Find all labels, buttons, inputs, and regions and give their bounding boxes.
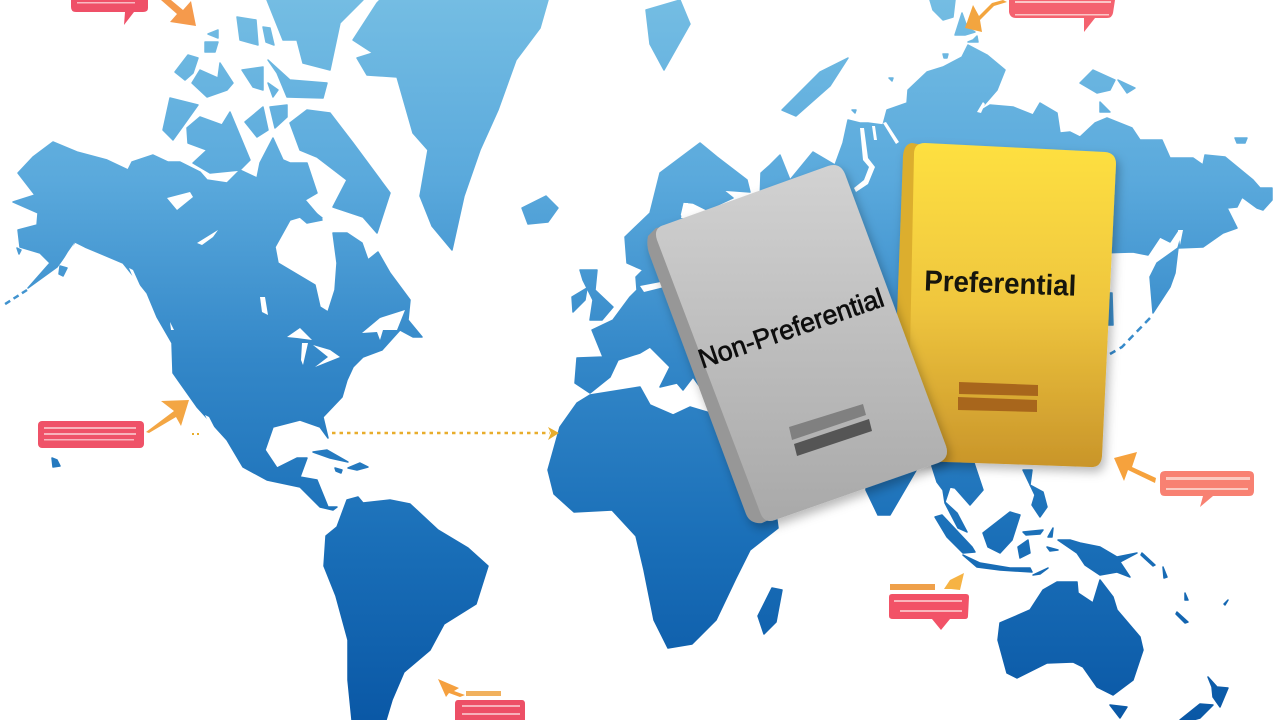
landmass: South America — [324, 497, 488, 720]
Preferential book — [892, 143, 1116, 467]
book cover — [656, 165, 947, 521]
arrow: top right — [965, 0, 1007, 32]
landmass: Kamchatka peninsula — [1150, 248, 1178, 313]
landmass: Australia — [998, 580, 1143, 695]
Non-Preferential book — [647, 165, 947, 523]
landmass: Philippines — [1023, 470, 1047, 517]
landmass: Indochina — [930, 460, 983, 532]
book label: Preferential — [924, 265, 1077, 303]
landmass: Borneo — [983, 512, 1020, 553]
Baltic Sea — [640, 203, 688, 292]
book stripes — [789, 404, 872, 456]
landmass: Ireland — [572, 288, 587, 312]
arrow: right — [1114, 452, 1156, 483]
Lake Winnipeg — [260, 297, 268, 315]
landmass: Indian peninsula — [866, 455, 925, 515]
landmass: Pacific islands — [1033, 528, 1228, 623]
landmass: island beside Preferential book — [1108, 293, 1113, 325]
landmass: New Zealand — [1180, 677, 1228, 720]
Gulf of California — [205, 415, 226, 452]
arrow: left — [146, 400, 189, 433]
book spine — [647, 220, 790, 523]
callout: left — [38, 421, 144, 448]
landmass: North America — [13, 138, 422, 510]
Vancouver strait — [129, 268, 174, 330]
landmass: Sulawesi — [1018, 530, 1043, 558]
landmass: Africa — [548, 387, 778, 648]
landmass: Greenland — [353, 0, 548, 250]
Siberian gulfs — [854, 122, 899, 192]
Canadian lakes — [167, 192, 218, 245]
book cover — [908, 143, 1116, 467]
landmass: Sumatra — [935, 515, 975, 553]
Okhotsk gulf cutout — [977, 102, 985, 113]
landmass: Alaskan and Pacific islands — [17, 248, 67, 467]
Lake Huron — [313, 345, 340, 367]
book spine — [892, 143, 950, 462]
Lake Superior — [287, 328, 312, 340]
landmass: Caribbean islands — [313, 450, 368, 473]
arrow: lower middle right — [944, 573, 964, 590]
landmass: Aleutian islands — [2, 290, 27, 306]
landmass: Arctic archipelagos — [646, 0, 1247, 143]
callout: top right — [1009, 0, 1115, 32]
callout: lower middle right — [889, 584, 969, 630]
landmass: Canadian Arctic islands — [163, 0, 390, 233]
dotted route arrow — [192, 427, 559, 440]
arrow: top left — [161, 0, 196, 26]
arrow: bottom center — [438, 679, 465, 697]
book label: Non-Preferential — [694, 283, 888, 374]
landmass: Eurasia — [575, 45, 1272, 455]
callout: bottom center — [455, 691, 525, 720]
callout: top left — [71, 0, 148, 25]
Red Sea — [722, 416, 768, 474]
landmass: Great Britain — [580, 270, 613, 320]
callout: right — [1160, 471, 1254, 507]
landmass: Java and Lesser Sunda islands — [963, 555, 1032, 572]
Alaskan inlet — [62, 242, 75, 262]
landmass: Tasmania — [1110, 705, 1127, 718]
landmass: New Guinea — [1058, 540, 1137, 577]
landmass: Iceland — [522, 196, 558, 224]
landmass: Madagascar — [758, 588, 782, 634]
Gulf of Saint Lawrence — [362, 310, 405, 340]
inland water and map cutouts — [62, 102, 1183, 474]
landmass: Kuril island chain — [1110, 318, 1150, 354]
Lake Michigan — [301, 343, 308, 365]
book stripes — [958, 382, 1038, 412]
Gulf of Carpentaria inset — [1178, 230, 1183, 245]
